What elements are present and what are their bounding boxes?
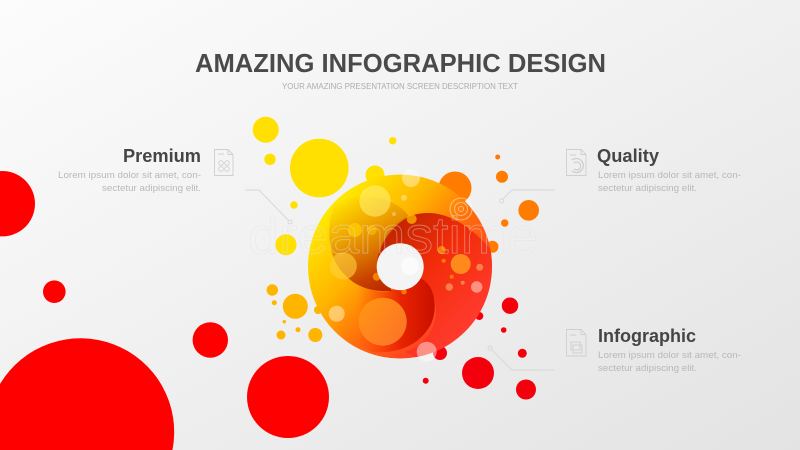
text: infographic description: sectetur adipiscing elit. <box>598 363 697 374</box>
text: infographic description: Lorem ipsum dolor sit amet, con- <box>598 350 741 361</box>
amber bubbles <box>267 284 322 342</box>
translucent spots <box>329 169 483 362</box>
blade: upper left amber <box>329 196 409 291</box>
disc base <box>308 174 492 358</box>
blade: lower orange and red <box>362 278 435 352</box>
text: premium description: Lorem ipsum dolor sit amet, con- <box>58 170 201 181</box>
central swirl disc <box>308 169 496 362</box>
icon: infographic document <box>566 330 586 356</box>
yellow bubbles <box>253 117 396 255</box>
icon: quality document <box>566 150 586 176</box>
faint spot in hole <box>401 257 419 275</box>
watermark: dreamstime <box>248 207 538 265</box>
connector: infographic <box>488 346 555 370</box>
decorative red circles on the left <box>0 171 329 450</box>
text: premium description: sectetur adipiscing elit. <box>102 183 201 194</box>
connector: premium <box>245 190 292 224</box>
panel: infographic <box>566 326 741 374</box>
connector: quality <box>500 190 555 203</box>
orange bubbles <box>438 154 539 253</box>
red bubbles <box>423 298 536 400</box>
text: quality description: sectetur adipiscing elit. <box>598 183 697 194</box>
text: quality description: Lorem ipsum dolor sit amet, con- <box>598 170 741 181</box>
subtitle: YOUR AMAZING PRESENTATION SCREEN DESCRIPTION TEXT <box>282 82 518 91</box>
swirl blades <box>329 196 496 362</box>
panel: premium <box>58 146 233 194</box>
watermark outline: dreamstime <box>248 208 538 266</box>
heading: quality: Quality <box>597 146 659 166</box>
heading: infographic: Infographic <box>598 326 696 346</box>
heading: premium: Premium <box>123 146 201 166</box>
panel: quality <box>566 146 741 194</box>
title: AMAZING INFOGRAPHIC DESIGN <box>195 48 606 78</box>
centre hole <box>377 243 424 290</box>
blade: right red <box>376 213 496 362</box>
icon: premium document <box>214 150 233 176</box>
watermark spiral <box>450 198 472 220</box>
